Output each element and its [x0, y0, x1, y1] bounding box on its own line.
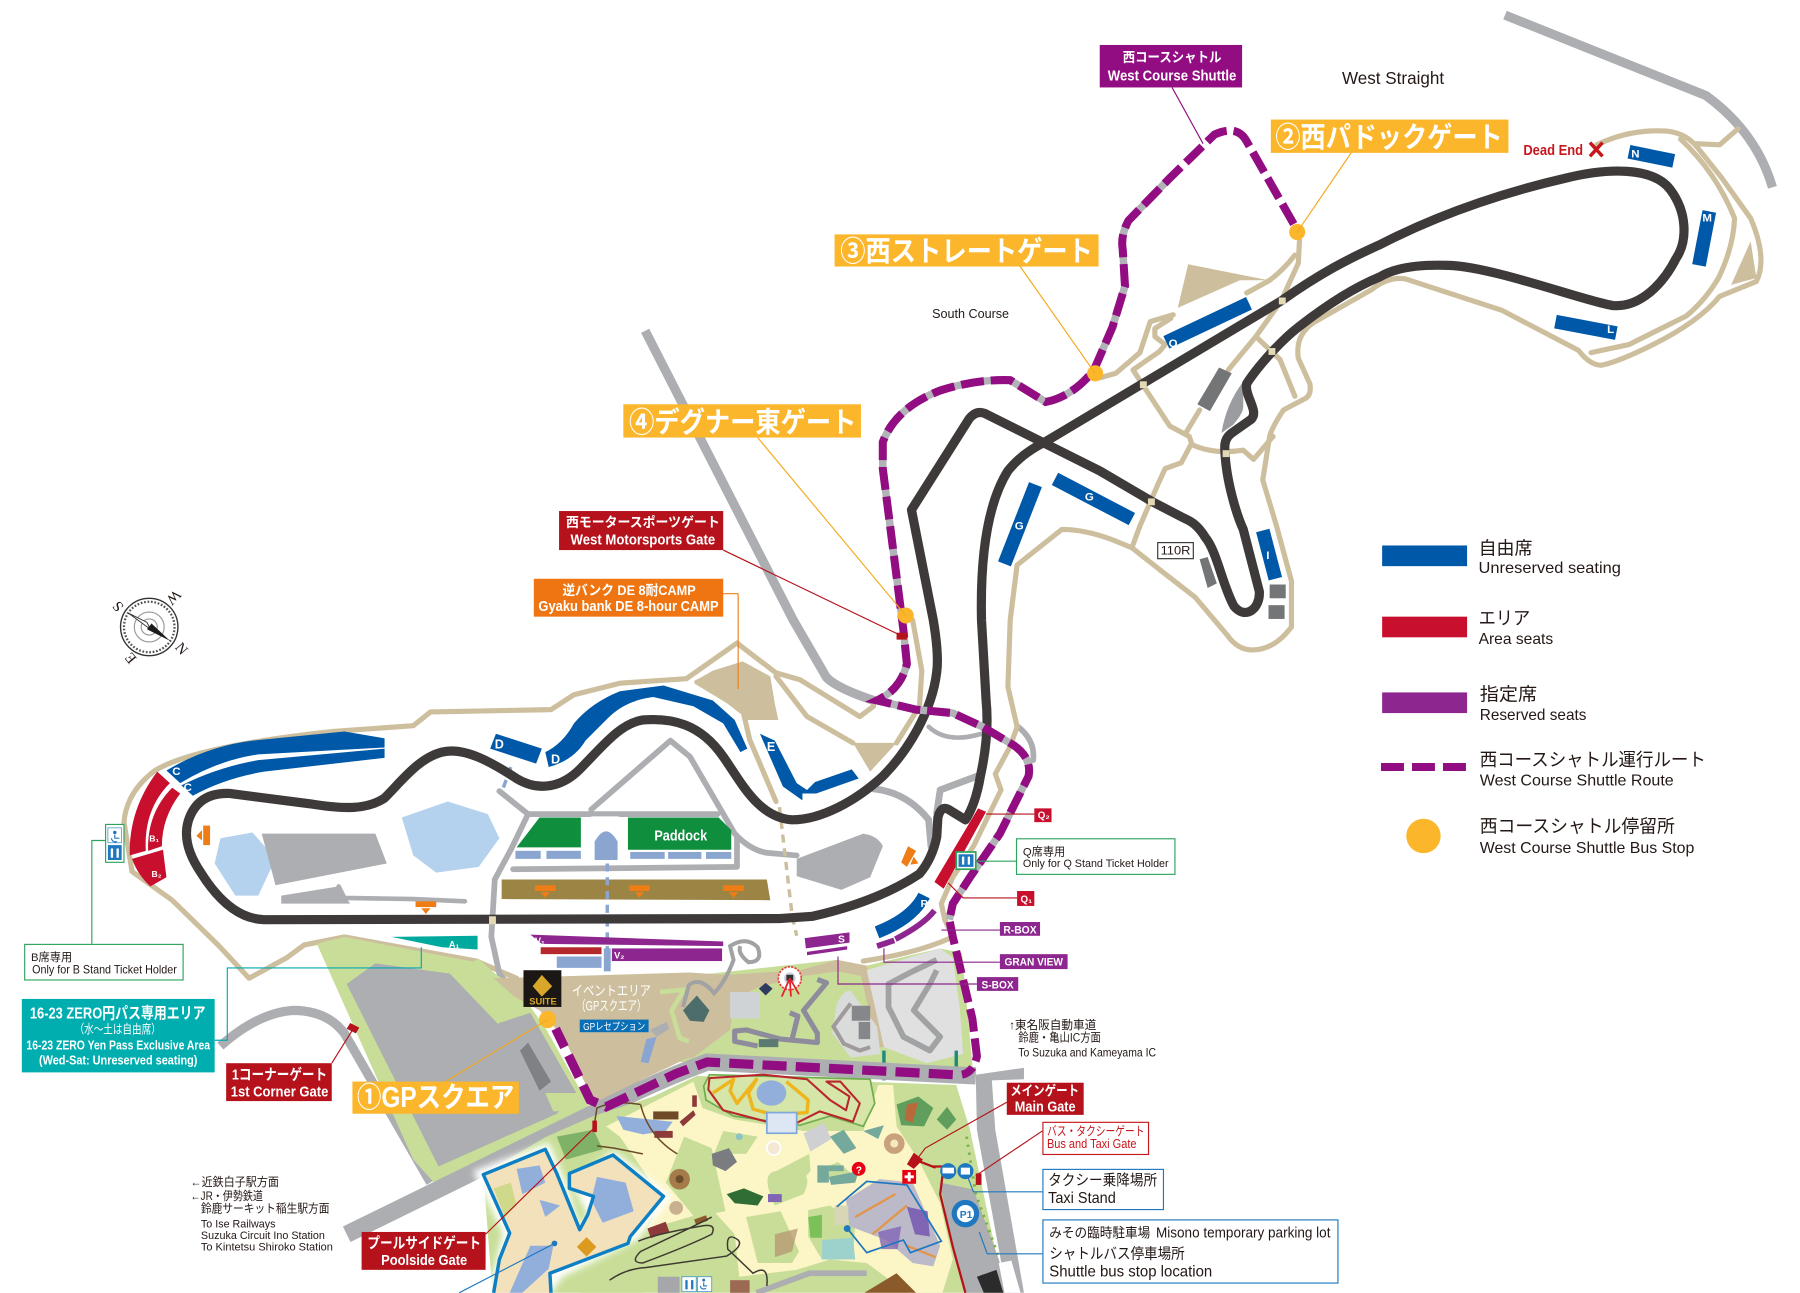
- label: Poolside Gate: Poolside Gate: [381, 1252, 467, 1269]
- icon: bus: [940, 1163, 956, 1179]
- pool blue outline: [483, 1149, 664, 1293]
- label: B stand only: Only for B Stand Ticket Holder: [32, 963, 177, 977]
- icon: accessible and restroom sign B stand: [106, 824, 124, 862]
- label: direction to Suzuka IC: 鈴鹿・亀山IC方面: [1018, 1029, 1101, 1044]
- tan plaza at Degner: [697, 661, 778, 720]
- blue and purple seating: R stand: R: [921, 899, 929, 910]
- label: Dead End: Dead End: [1523, 143, 1583, 159]
- event area label: イベントエリア: [572, 983, 651, 998]
- label: West Course Shuttle: 西コースシャトル: [1123, 50, 1222, 65]
- label: B stand only: B席専用: [31, 951, 72, 964]
- icon: restroom and accessible: [682, 1277, 712, 1292]
- tag: S-BOX: [977, 977, 1018, 992]
- tag: Q1: [1017, 891, 1034, 906]
- label: Main Gate: [1007, 1082, 1084, 1115]
- infield lakes and parking: [215, 801, 883, 904]
- legend: bus stop: [1406, 815, 1694, 857]
- red gate markers: [347, 1023, 982, 1185]
- label: direction to Suzuka IC: [1009, 1017, 1156, 1059]
- kids area blue loop: [837, 1181, 941, 1253]
- icon: information: ?: [856, 1165, 862, 1176]
- tag: S-BOX: S-BOX: [982, 980, 1014, 992]
- bus stop ④ Degner East Gate: [898, 607, 914, 624]
- legend: bus stop: 西コースシャトル停留所: [1480, 815, 1675, 836]
- kids pond and blue squares: [757, 1080, 786, 1106]
- label: Bus and Taxi Gate: バス・タクシーゲート: [1047, 1125, 1145, 1139]
- label: 1st Corner Gate: 1コーナーゲート: [232, 1065, 327, 1083]
- compass: S: [110, 598, 127, 614]
- tag: Q2: Q₂: [1038, 811, 1050, 822]
- shuttle route grey base: [877, 178, 1170, 920]
- label: Main Gate: メインゲート: [1010, 1082, 1079, 1098]
- label: Misono parking and shuttle bus stop: Shuttle bus stop location: [1049, 1263, 1212, 1281]
- GP reception tag: GPレセプション: [583, 1021, 645, 1033]
- legend: shuttle route: West Course Shuttle Route: [1480, 771, 1674, 789]
- compass: W: [162, 586, 184, 608]
- label: Taxi Stand: タクシー乗降場所: [1048, 1172, 1157, 1189]
- label: 16-23 Zero Yen area: [22, 999, 215, 1072]
- label: direction to Ise Railways: ←JR・伊勢鉄道: [191, 1188, 263, 1203]
- label: direction to Ise Railways: [191, 1174, 333, 1253]
- blue seating: stands C: C: [184, 782, 192, 794]
- park base green: [483, 1076, 1004, 1293]
- cream central area: [606, 1082, 953, 1293]
- bus stop ② West Paddock Gate: [1289, 224, 1305, 240]
- purple seating: S stand: S: [838, 935, 845, 946]
- label: West Motorsports Gate: West Motorsports Gate: [571, 531, 715, 548]
- red seating: Q stands: [934, 808, 986, 889]
- orange markers: [196, 826, 918, 914]
- tan wedge near S curves: [853, 743, 897, 772]
- blue seating: G, O, I, L, M, N stands: [1004, 148, 1712, 579]
- label: Taxi Stand: [1043, 1169, 1163, 1210]
- paddock: [515, 816, 731, 865]
- label: direction to Ise Railways: To Ise Railways: [201, 1218, 276, 1230]
- gate label ③ West Straight Gate: ③西ストレートゲート: [840, 236, 1093, 268]
- legend: area seats: エリア: [1479, 608, 1530, 629]
- legend: unreserved seating: [1382, 538, 1621, 577]
- label: 16-23 Zero Yen area: 16-23 ZERO円パス専用エリア: [30, 1003, 205, 1022]
- grey buildings by track: [1197, 368, 1286, 619]
- label: Taxi Stand: Taxi Stand: [1048, 1189, 1116, 1207]
- label: Gyaku bank camp: 逆バンク DE 8耐CAMP: [562, 583, 696, 598]
- blue seating: G, O, I, L, M, N stands: O: [1169, 338, 1178, 350]
- label: Misono parking and shuttle bus stop: Misono temporary parking lot: [1156, 1226, 1330, 1242]
- legend: [1381, 538, 1706, 857]
- label: direction to Ise Railways: To Kintetsu Shiroko Station: [201, 1241, 333, 1253]
- compass: E: [122, 649, 140, 666]
- purple seating: V stands: [530, 935, 723, 971]
- label: West Course Shuttle: [1100, 45, 1242, 87]
- red seating: stands B: B₁: [149, 834, 159, 844]
- race track: [186, 171, 1684, 920]
- dotted walkways: [502, 767, 797, 971]
- kart zone: [641, 941, 963, 1080]
- blue seating: G, O, I, L, M, N stands: N: [1631, 148, 1640, 160]
- label: West Motorsports Gate: [559, 511, 723, 550]
- grey wedge at spoon: [1221, 381, 1243, 433]
- GP Square tan plaza: [494, 960, 884, 1109]
- event area label: （GPスクエア）: [576, 998, 646, 1013]
- legend: reserved seats: [1382, 683, 1586, 724]
- tan service roads: east section and Degner: [124, 620, 922, 978]
- paddock label: Paddock: [654, 828, 708, 845]
- blue seating: stands D and E: D: [551, 753, 560, 767]
- red seating: stands B: [130, 772, 180, 886]
- blue seating: stands C: [166, 731, 385, 796]
- purple seating: V stands: V₂: [614, 951, 624, 961]
- legend: reserved seats: 指定席: [1480, 683, 1537, 704]
- tag: Q2: [1034, 808, 1052, 822]
- blue seating: G, O, I, L, M, N stands: I: [1266, 550, 1269, 562]
- label: direction to Ise Railways: ←近鉄白子駅方面: [191, 1174, 279, 1189]
- mini car track: [704, 1075, 875, 1126]
- event area green zone: [660, 948, 973, 1076]
- legend: reserved seats: Reserved seats: [1480, 706, 1586, 724]
- label: Misono parking and shuttle bus stop: [1043, 1220, 1338, 1283]
- event area label: [572, 983, 651, 1013]
- tag: R-BOX: R-BOX: [1003, 924, 1037, 936]
- green patches: [580, 1131, 855, 1293]
- pool zone white glow: [473, 1142, 673, 1293]
- label: South Course: South Course: [932, 307, 1009, 321]
- east grey road and parking: [915, 1068, 1024, 1293]
- track bridges: [489, 298, 1286, 924]
- label: 16-23 Zero Yen area: 16-23 ZERO Yen Pass Exclusive Area: [26, 1038, 211, 1052]
- bus stop ③ West Straight Gate: [1087, 365, 1103, 381]
- label: 110R: [1158, 543, 1193, 559]
- tan triangle beside O stand: [1178, 264, 1268, 308]
- blue seating: stands C: C: [172, 766, 180, 778]
- label: direction to Ise Railways: Suzuka Circuit Ino Station: [201, 1230, 325, 1242]
- legend: unreserved seating: Unreserved seating: [1479, 559, 1621, 577]
- label: Bus and Taxi Gate: Bus and Taxi Gate: [1047, 1137, 1136, 1151]
- compass: [110, 586, 191, 666]
- label: B stand only: [25, 944, 183, 980]
- teal area: A1 stand: A₁: [449, 939, 459, 949]
- label: 1st Corner Gate: [226, 1063, 332, 1101]
- legend: area seats: [1382, 608, 1553, 648]
- label: Poolside Gate: プールサイドゲート: [367, 1234, 481, 1252]
- park buildings and patches: [616, 1095, 956, 1293]
- green strip in plaza: [660, 990, 689, 1041]
- GP reception tag: [580, 1020, 649, 1033]
- gate label ② West Paddock Gate: ②西パドックゲート: [1275, 122, 1503, 154]
- pool water: [510, 1165, 634, 1293]
- grey parking lot: [347, 963, 576, 1167]
- panel: Suzuka Circuit park: [473, 1075, 1004, 1293]
- icon: P1 parking: P1: [960, 1210, 973, 1221]
- label: Poolside Gate: [362, 1232, 486, 1270]
- icon: restroom Q stand: [956, 852, 976, 869]
- outer grey access roads: [220, 15, 1772, 1183]
- label: Misono parking and shuttle bus stop: シャトルバス停車場所: [1049, 1245, 1185, 1262]
- shuttle route: [877, 131, 1294, 1075]
- pit viewing brown bar with markers: [502, 880, 770, 900]
- tan triangle west end: [1731, 241, 1756, 285]
- coaster track lines: [610, 1217, 767, 1286]
- tag: Q1: Q₁: [1021, 894, 1032, 905]
- VIP Suite badge: SUITE: [529, 997, 557, 1007]
- blue seating: stands D and E: D: [495, 738, 504, 752]
- blue seating: G, O, I, L, M, N stands: G: [1015, 520, 1024, 532]
- dark green wood: [557, 1130, 603, 1160]
- label: West Straight: West Straight: [1342, 68, 1444, 88]
- label: 16-23 Zero Yen area: (Wed-Sat: Unreserved seating): [39, 1053, 197, 1067]
- legend: unreserved seating: 自由席: [1479, 538, 1533, 559]
- label: 110R: 110R: [1161, 544, 1191, 558]
- blue seating: stands D and E: [490, 686, 859, 800]
- label: West Course Shuttle: West Course Shuttle: [1108, 68, 1236, 85]
- main grey road: [347, 1062, 976, 1234]
- purple seating: S stand: [805, 932, 849, 955]
- legend: bus stop: West Course Shuttle Bus Stop: [1480, 839, 1694, 857]
- label: 16-23 Zero Yen area: （水～土は自由席）: [75, 1022, 161, 1036]
- label: Q stand only: Q席専用: [1023, 845, 1065, 858]
- label: 1st Corner Gate: 1st Corner Gate: [231, 1083, 328, 1100]
- bus stop ① GP Square: [539, 1011, 556, 1028]
- label: Gyaku bank camp: [534, 579, 723, 617]
- blue seating: G, O, I, L, M, N stands: M: [1702, 213, 1712, 225]
- legend: area seats: Area seats: [1479, 630, 1553, 648]
- compass: N: [171, 640, 191, 659]
- red seating: stands B: B₂: [152, 869, 162, 879]
- label: Gyaku bank camp: Gyaku bank DE 8-hour CAMP: [538, 598, 719, 615]
- blue seating: G, O, I, L, M, N stands: G: [1085, 492, 1094, 504]
- icon: first aid: [902, 1170, 916, 1184]
- label: Main Gate: Main Gate: [1015, 1098, 1076, 1115]
- label: direction to Ise Railways: 鈴鹿サーキット稲生駅方面: [201, 1200, 329, 1215]
- teal area: A1 stand: [391, 936, 478, 950]
- icon: P1 parking: [952, 1200, 979, 1227]
- legend: shuttle route: 西コースシャトル運行ルート: [1480, 749, 1706, 770]
- tan service roads: west section: [863, 129, 1761, 961]
- purple seating: V stands: V₁: [535, 936, 545, 946]
- grey infield roads around paddock: [491, 741, 797, 1002]
- label: Q stand only: Only for Q Stand Ticket Holder: [1023, 858, 1169, 870]
- label: Misono parking and shuttle bus stop: みその臨時駐車場: [1049, 1226, 1150, 1241]
- gate label ④ Degner East Gate: ④デグナー東ゲート: [629, 406, 856, 439]
- label: direction to Suzuka IC: ↑東名阪自動車道: [1009, 1017, 1096, 1032]
- icon: taxi: [957, 1163, 973, 1179]
- tag: GRAN VIEW: GRAN VIEW: [1004, 957, 1064, 969]
- label: direction to Suzuka IC: To Suzuka and Kameyama IC: [1018, 1045, 1156, 1059]
- blue seating: G, O, I, L, M, N stands: L: [1607, 324, 1614, 336]
- blue and purple seating: R stand: [877, 896, 934, 946]
- leader lines: [92, 87, 1351, 1293]
- label: West Motorsports Gate: 西モータースポーツゲート: [566, 514, 720, 530]
- light green parking field: [317, 937, 592, 1185]
- blue seating: stands D and E: E: [767, 740, 775, 754]
- kids area: [846, 1179, 940, 1266]
- legend: shuttle route: [1381, 749, 1706, 789]
- gate label ① GP Square: ①GPスクエア: [357, 1082, 514, 1114]
- shuttle route bottom section: [556, 1029, 953, 1107]
- label: Bus and Taxi Gate: [1043, 1122, 1149, 1154]
- icon: information: [852, 1162, 866, 1176]
- VIP Suite badge: [523, 970, 561, 1007]
- label: Q stand only: [1017, 839, 1175, 874]
